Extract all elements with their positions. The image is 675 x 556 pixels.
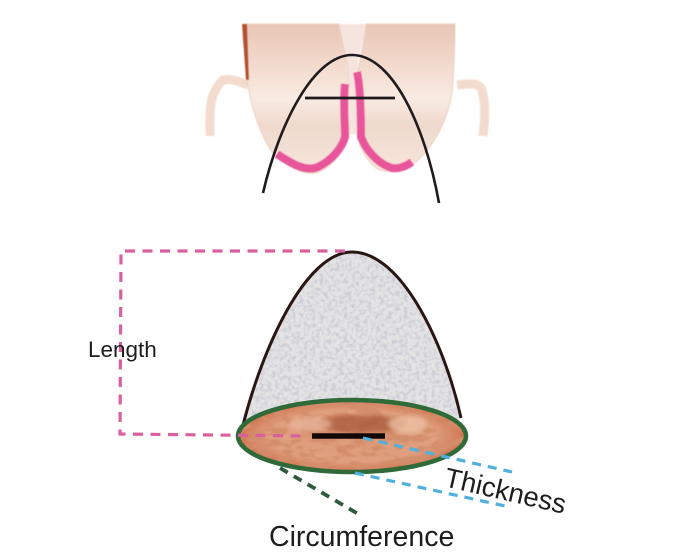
dome outline: [243, 252, 461, 425]
length label: Length: [88, 337, 157, 362]
parabola curve: [263, 55, 439, 203]
right lobe: [358, 24, 455, 171]
dome body: [244, 252, 460, 450]
left pink line: [277, 84, 345, 169]
central dark region: [318, 415, 406, 433]
left lobe: [243, 24, 349, 173]
dark red left edge: [242, 24, 249, 80]
cut surface: [238, 400, 466, 472]
left arm: [210, 79, 248, 136]
thickness dashed lines: [355, 438, 512, 506]
central black bar: [312, 433, 385, 439]
thickness label: Thickness: [442, 462, 569, 520]
illustration: dome specimen: [238, 252, 466, 472]
pale patch left: [288, 417, 332, 431]
horizontal measure line: [305, 97, 395, 99]
circumference label: Circumference: [269, 521, 454, 553]
right pink line: [357, 72, 412, 168]
central cleft: [340, 24, 366, 134]
right arm: [457, 84, 485, 136]
circumference ellipse: [238, 400, 466, 472]
length dashed bracket: [120, 251, 345, 436]
pale patch right: [388, 415, 428, 433]
illustration: top anatomical diagram: [210, 24, 485, 173]
circumference dashed line: [280, 468, 360, 515]
